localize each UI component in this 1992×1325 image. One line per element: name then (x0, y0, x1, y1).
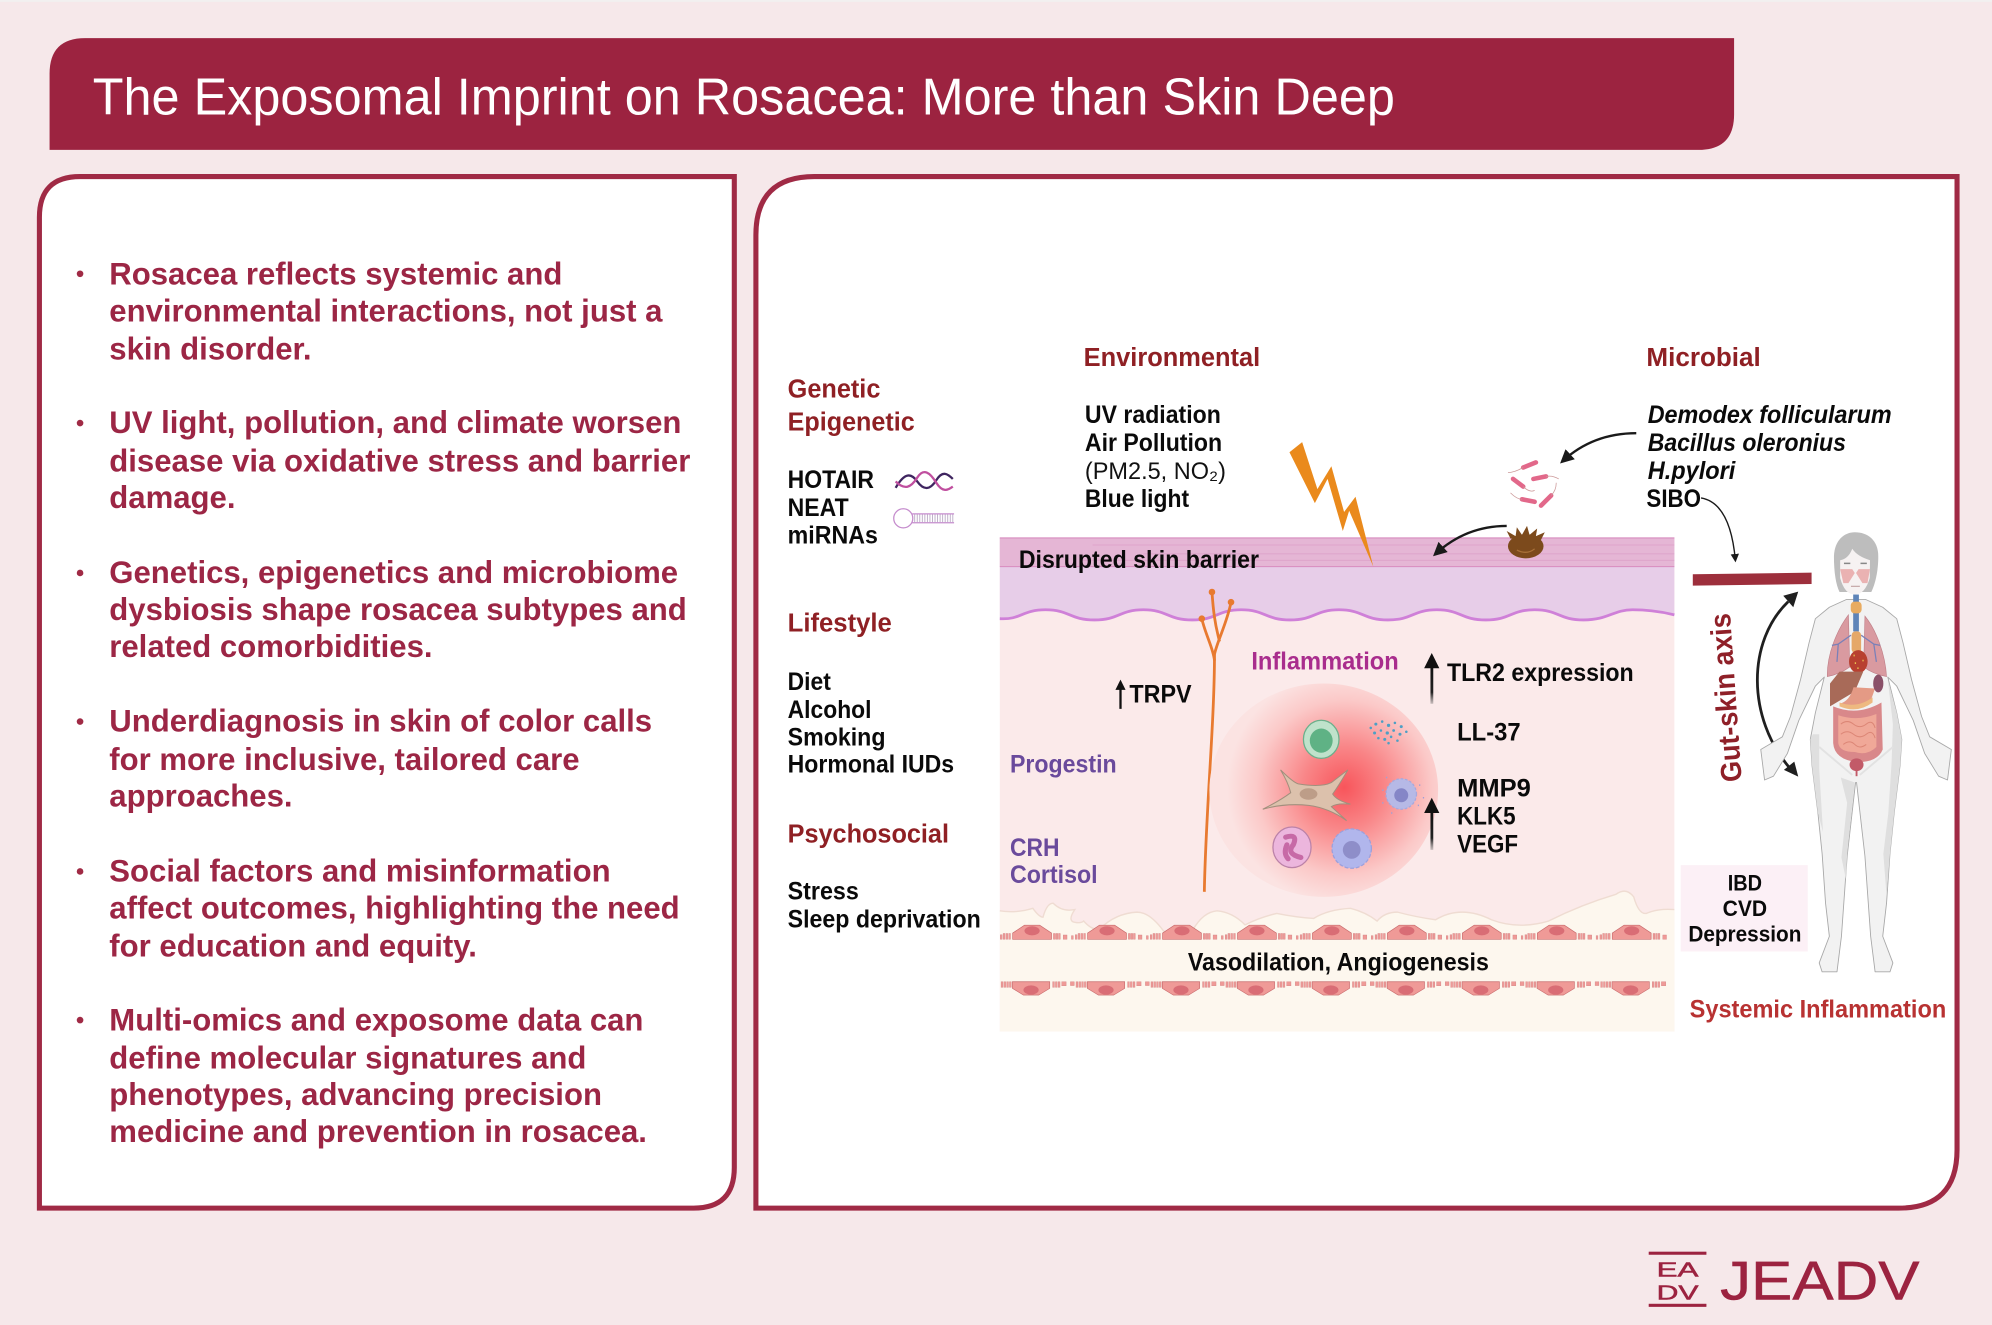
bullet: multi-omics: Multi-omics and exposome data can (109, 1002, 643, 1037)
label: TRPV: TRPV (1129, 682, 1192, 709)
label: TLR2 expression: TLR2 expression (1447, 660, 1634, 687)
bullet: skin of color: for more inclusive, tailored care (109, 742, 580, 777)
column: lifestyle factors: Hormonal IUDs (788, 751, 954, 778)
cell: green leukocyte (1303, 720, 1339, 758)
bullet: multi-omics: medicine and prevention in rosacea. (109, 1114, 647, 1149)
skin cross-section (937, 537, 1686, 1032)
logo: EADV mark (1649, 1252, 1706, 1307)
column: genetic and epigenetic factors (788, 374, 915, 550)
blue cytokine dots (1369, 720, 1408, 744)
column: psychosocial factors: Psychosocial (788, 818, 949, 848)
bullet: UV, pollution, climate (77, 405, 690, 515)
rosacea facial redness (1840, 569, 1870, 583)
comorbidities box (1681, 865, 1808, 952)
bullet: genetics and microbiome: dysbiosis shape rosacea subtypes and (109, 592, 687, 627)
large intestine (1833, 703, 1883, 762)
spleen (1873, 675, 1883, 692)
column: genetic and epigenetic factors: HOTAIR (788, 467, 874, 494)
label: progestin: Progestin (1010, 750, 1117, 778)
cell: fibroblast (1263, 770, 1350, 821)
arrow: mite to skin barrier (1436, 526, 1507, 554)
panel: key points (39, 177, 734, 1208)
label: gut-skin axis: Gut-skin axis (1705, 612, 1749, 783)
stomach and pancreas (1840, 687, 1875, 707)
bullet: social factors: Social factors and misinformation (109, 854, 611, 889)
cell: neutrophil (1273, 827, 1311, 868)
labels: CRH and cortisol: CRH (1010, 834, 1060, 862)
heart (1849, 650, 1868, 673)
body shading (1810, 680, 1902, 896)
column: psychosocial factors: Sleep deprivation (788, 906, 981, 933)
trachea and thyroid (1854, 595, 1858, 631)
label: LL-37: LL-37 (1457, 720, 1521, 747)
gut bar (1693, 573, 1812, 586)
bladder (1850, 758, 1864, 771)
column: environmental factors (1084, 342, 1260, 513)
inflammation cluster (1209, 683, 1438, 897)
label: inflammation: Inflammation (1251, 648, 1399, 675)
bullet: systemic and environmental: Rosacea reflects systemic and (109, 257, 562, 292)
logo: EADV mark: EA (1657, 1260, 1699, 1282)
arrow: TRPV increase (1115, 680, 1126, 709)
column: lifestyle factors (788, 607, 954, 778)
column: microbial factors: Bacillus oleronius (1648, 430, 1846, 457)
arrow: mediators increase (1424, 798, 1439, 850)
bullet: social factors (77, 854, 680, 964)
arrow: TLR2 increase (1424, 653, 1439, 704)
bullet: multi-omics (77, 1002, 647, 1149)
column: psychosocial factors (788, 818, 981, 933)
icon: bacteria (1508, 462, 1559, 506)
label: vasodilation and angiogenesis: Vasodilation, Angiogenesis (1188, 950, 1489, 977)
logo: EADV mark: DV (1657, 1283, 1699, 1305)
aorta (1852, 631, 1861, 653)
label: disrupted skin barrier: Disrupted skin barrier (1019, 547, 1259, 574)
bullet: UV, pollution, climate: UV light, pollution, and climate worsen (109, 405, 681, 440)
icon: sensory nerve (1200, 590, 1233, 892)
face (1840, 549, 1870, 595)
lungs (1827, 615, 1887, 677)
bullet: multi-omics: phenotypes, advancing precision (109, 1077, 602, 1112)
icon: DNA helix (896, 472, 953, 490)
column: environmental factors: Blue light (1085, 486, 1189, 513)
endothelial cells: upper vessel wall (938, 925, 1685, 939)
column: genetic and epigenetic factors: miRNAs (788, 523, 878, 550)
bullet: UV, pollution, climate: damage. (109, 480, 235, 515)
column: genetic and epigenetic factors: Genetic (788, 374, 880, 404)
panel: diagram frame (756, 177, 1957, 1208)
column: lifestyle factors: Lifestyle (788, 607, 892, 637)
bullet: systemic and environmental: skin disorder. (109, 332, 312, 367)
cell: lymphocyte (1332, 829, 1371, 868)
labels: MMP9, KLK5, VEGF: KLK5 (1457, 803, 1516, 830)
comorbidities box: CVD (1723, 896, 1767, 921)
bullet: social factors: affect outcomes, highlighting the need (109, 890, 680, 925)
column: lifestyle factors: Diet (788, 669, 831, 696)
column: microbial factors: Microbial (1646, 342, 1761, 372)
title banner: The Exposomal Imprint on Rosacea: More than Skin Deep (93, 68, 1395, 126)
column: lifestyle factors: Alcohol (788, 697, 872, 724)
arrow: SIBO to gut (1701, 498, 1735, 560)
body silhouette (1761, 600, 1951, 972)
arrow: microbes to bacteria (1563, 433, 1636, 461)
column: environmental factors: Air Pollution (1085, 430, 1222, 457)
bullet: multi-omics: define molecular signatures and (109, 1040, 586, 1075)
liver (1830, 672, 1863, 706)
bullet: systemic and environmental (77, 257, 663, 367)
column: microbial factors: SIBO (1646, 486, 1701, 513)
title banner (50, 38, 1734, 150)
hair (1834, 532, 1878, 592)
bullet: genetics and microbiome: Genetics, epigenetics and microbiome (109, 555, 678, 590)
bullet: skin of color (77, 704, 652, 814)
column: genetic and epigenetic factors: Epigenetic (788, 407, 915, 437)
column: microbial factors (1646, 342, 1892, 513)
column: psychosocial factors: Stress (788, 878, 859, 905)
logo: JEADV wordmark: JEADV (1720, 1251, 1920, 1312)
labels: MMP9, KLK5, VEGF: MMP9 (1457, 776, 1531, 803)
icon: lightning bolt (1289, 442, 1373, 567)
bullet: skin of color: approaches. (109, 779, 293, 814)
column: microbial factors: Demodex follicularum (1648, 402, 1892, 429)
column: microbial factors: H.pylori (1648, 458, 1736, 485)
cell: degranulating mast cell (1382, 777, 1424, 813)
bullet: genetics and microbiome: related comorbidities. (109, 629, 433, 664)
bullet: social factors: for education and equity. (109, 929, 477, 964)
icon: demodex mite (1507, 526, 1545, 558)
column: environmental factors: (PM2.5, NO₂) (1085, 458, 1226, 485)
labels: MMP9, KLK5, VEGF (1457, 776, 1531, 858)
labels: MMP9, KLK5, VEGF: VEGF (1457, 831, 1518, 858)
column: environmental factors: UV radiation (1085, 402, 1221, 429)
icon: miRNA hairpin (894, 509, 954, 528)
bullet: UV, pollution, climate: disease via oxidative stress and barrier (109, 443, 690, 478)
bullet: systemic and environmental: environmental interactions, not just a (109, 293, 663, 328)
small intestine (1838, 714, 1876, 753)
comorbidities box: Depression (1688, 921, 1801, 946)
column: lifestyle factors: Smoking (788, 725, 885, 752)
human figure (1761, 532, 1951, 972)
column: genetic and epigenetic factors: NEAT (788, 495, 849, 522)
labels: CRH and cortisol (1010, 834, 1098, 889)
arrow: gut-skin axis (1757, 592, 1798, 777)
comorbidities box: IBD (1728, 871, 1762, 896)
label: systemic inflammation: Systemic Inflammation (1690, 997, 1946, 1024)
bullet: genetics and microbiome (77, 555, 687, 664)
column: environmental factors: Environmental (1084, 342, 1260, 372)
endothelial cells: lower vessel wall (937, 982, 1686, 995)
bullet: skin of color: Underdiagnosis in skin of color calls (109, 704, 652, 739)
labels: CRH and cortisol: Cortisol (1010, 861, 1098, 889)
